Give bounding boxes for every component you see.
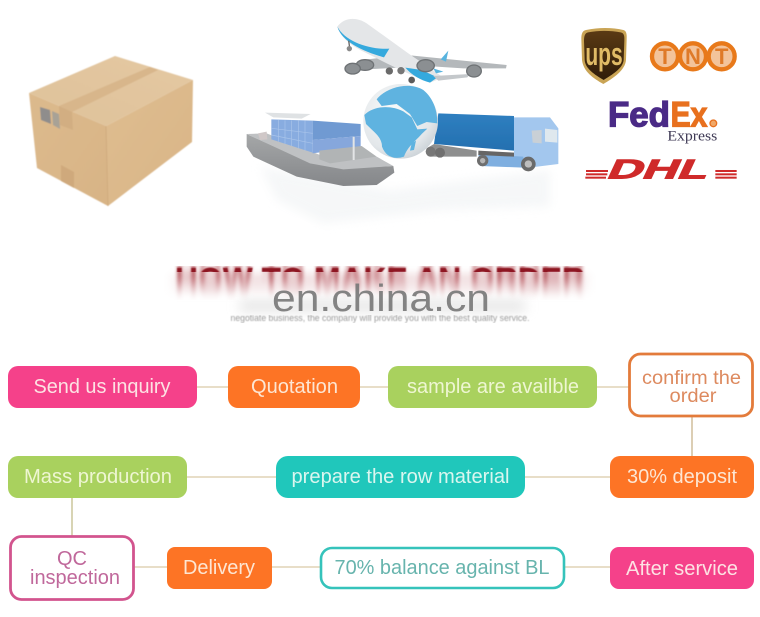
- step: send us inquiry: [8, 366, 197, 408]
- logo: FedEx Express: Fed: [608, 96, 670, 135]
- step: quotation: [228, 366, 360, 408]
- step: QC inspection: [10, 536, 134, 600]
- step: confirm the order: [630, 354, 752, 416]
- subtitle text: negotiate business, the company will provide you with the best quality service.: [230, 313, 530, 324]
- step: quotation: Quotation: [251, 376, 338, 398]
- logo: TNT: T: [658, 44, 672, 69]
- blurred grey band: [240, 298, 525, 314]
- step: after service: [610, 547, 754, 589]
- step: confirm the order: order: [670, 386, 717, 407]
- step: QC inspection: inspection: [30, 567, 120, 589]
- step: delivery: [167, 547, 272, 589]
- logo: TNT: N: [685, 44, 701, 69]
- step: QC inspection: QC: [57, 548, 87, 570]
- logo: FedEx Express: [608, 96, 718, 144]
- step: mass production: [8, 456, 187, 498]
- logo: UPS: ups: [585, 36, 623, 72]
- photo: transport group with plane, globe, ship and truck: [247, 19, 558, 223]
- step: after service: After service: [626, 558, 738, 580]
- photo: cardboard box: [29, 56, 193, 206]
- step: 70% balance against BL: 70% balance against BL: [334, 557, 550, 579]
- logo: FedEx Express: Ex: [671, 96, 708, 135]
- step: send us inquiry: Send us inquiry: [34, 376, 170, 398]
- flow connectors: [72, 387, 692, 567]
- icon: container ship: [247, 113, 394, 186]
- step: 30% deposit: [610, 456, 754, 498]
- icon: globe: [363, 84, 438, 159]
- logo: UPS: [581, 28, 627, 84]
- step: delivery: Delivery: [183, 557, 255, 579]
- heading smear: HOW TO MAKE AN ORDER: [175, 257, 585, 299]
- step: 70% balance against BL: [321, 548, 564, 588]
- step: 30% deposit: 30% deposit: [627, 466, 737, 488]
- icon: truck: [426, 113, 558, 171]
- heading fade: [160, 272, 600, 301]
- logo: TNT: [652, 43, 735, 69]
- step: mass production: Mass production: [24, 466, 172, 488]
- heading band: [176, 274, 584, 294]
- icon: airplane: [337, 19, 507, 83]
- step: prepare the row material: [276, 456, 525, 498]
- step: prepare the row material: prepare the row material: [292, 466, 510, 488]
- heading sharp top: HOW TO MAKE AN ORDER: [175, 261, 585, 303]
- watermark: en.china.cn: [272, 278, 490, 320]
- logo: DHL: DHL: [602, 155, 716, 185]
- step: confirm the order: confirm the: [642, 368, 741, 389]
- heading: how to make an order (blurred): [173, 266, 587, 298]
- logo: TNT: T: [715, 44, 729, 69]
- reflection: [260, 167, 550, 223]
- logo: FedEx Express: Express: [667, 128, 718, 144]
- step: sample are availble: [388, 366, 597, 408]
- logos: couriers: [581, 28, 737, 185]
- step: sample are availble: sample are availble: [407, 376, 579, 398]
